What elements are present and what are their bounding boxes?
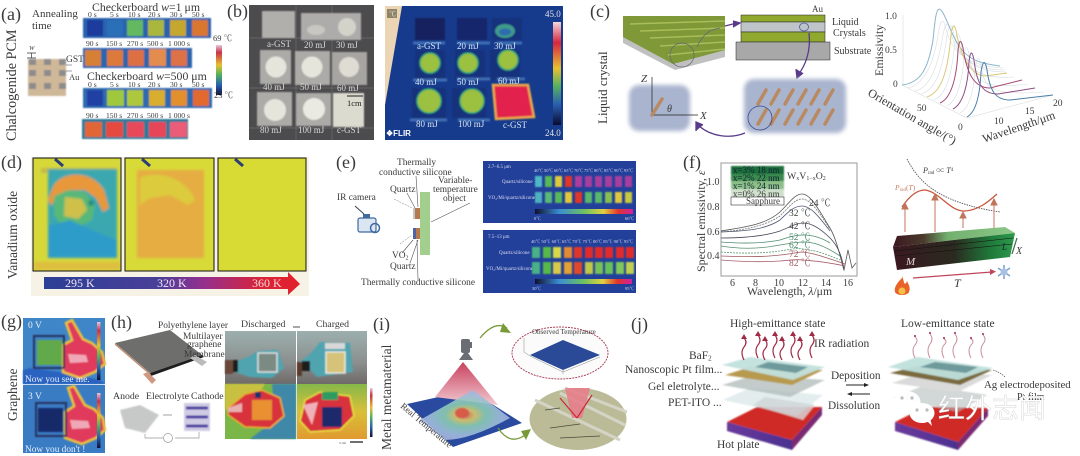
emissivity line chart: 0.4 [707, 251, 720, 262]
emissivity line chart [694, 163, 857, 298]
IR setup diagram: VO [392, 251, 406, 261]
3D emissivity chart: 20 [1053, 99, 1063, 109]
emissivity line chart: 0.6 [707, 227, 720, 238]
photo discharged [225, 331, 296, 384]
sample photograph: c-GST [337, 125, 361, 135]
electrode labels and lattice: Electrolyte [146, 391, 190, 402]
deposition arrows [828, 370, 881, 412]
checkerboard sample photo: W [29, 45, 35, 52]
time labels row 4: 1 000 s [168, 111, 190, 120]
emissivity line chart: 10 [774, 278, 784, 289]
IR setup diagram: IR camera [337, 193, 377, 203]
electrode labels and lattice [113, 391, 224, 442]
time labels row 3: 10 s [128, 80, 140, 89]
thermal array 3-5 um [483, 161, 636, 223]
rod array box [744, 79, 846, 133]
3D emissivity chart: 15 [1025, 107, 1035, 117]
sample photograph: 20 mJ [304, 40, 326, 50]
panel letter a: (a) [1, 4, 21, 25]
diagram: radiative power bar: rad [928, 171, 935, 176]
angle inset: Z [641, 73, 648, 85]
FLIR thermal image: ❖FLIR [386, 129, 411, 138]
emissivity line chart: 72 ℃ [789, 249, 810, 260]
real temperature plate [399, 362, 522, 450]
3D emissivity chart: Orientation angle/(°) [866, 85, 959, 147]
FLIR thermal image: 24.0 [545, 128, 561, 138]
electrode labels and lattice: Cathode [191, 391, 224, 402]
high emittance stack: 2 [708, 354, 712, 362]
device layer sketch: Polyethylene layer [158, 321, 229, 331]
thermal array 3-5 um: 2.7–6.5 μm [488, 165, 511, 170]
layer cross-section: Crystals [833, 28, 866, 39]
state titles: Low-emittance state [901, 318, 995, 330]
panel: h battery device [111, 312, 372, 445]
emissivity line chart: 42 ℃ [789, 221, 810, 232]
temperature arrow: 295 K [65, 276, 95, 290]
FLIR thermal image [385, 6, 563, 140]
emissivity line chart: O [816, 171, 823, 182]
panel: a chalcogenide PCM [1, 0, 233, 141]
diagram: radiative power bar: X [1015, 246, 1023, 257]
deposition arrows: Deposition [831, 370, 881, 382]
time labels row 2: 150 s [106, 39, 122, 48]
diagram: radiative power bar: T [954, 276, 962, 290]
annealing time label: time [32, 20, 52, 32]
high emittance stack: Gel eletrolyte... [648, 381, 720, 393]
thermal hand 3 V [23, 385, 105, 455]
3D emissivity chart: Wavelength/μm [980, 108, 1058, 146]
thermal array 7.5-13 um: 95℃ [625, 286, 634, 291]
thermal array 7.5-13 um: Quartz/silicone [499, 251, 530, 256]
panel letter e: (e) [336, 152, 356, 173]
temperature arrow: 360 K [252, 276, 282, 290]
colour scale: 69 ℃ [213, 33, 232, 43]
panel letter b: (b) [227, 1, 248, 22]
time labels row 2: 1 000 s [168, 39, 190, 48]
sample photograph: 1cm [347, 98, 362, 108]
observed temperature oval: Observed Temperature [532, 328, 596, 336]
diagram: radiative power bar: ( [906, 183, 909, 192]
thermal array 7.5-13 um: 40℃ 50℃ 60℃ 65℃ 70℃ 75℃ 80℃ 85℃ 90℃ 95℃ [531, 239, 634, 244]
panel: i metal metamaterial [373, 314, 627, 450]
FLIR thermal image: ℃ [389, 10, 396, 18]
row label chalcogenide PCM: Chalcogenide PCM [4, 29, 20, 141]
time labels row 3: 5 s [110, 80, 119, 89]
FLIR thermal image: 60 mJ [498, 76, 520, 86]
diagram: radiative power bar: T [946, 166, 951, 175]
checkerboard sample photo: Au [69, 72, 80, 82]
high emittance stack: Nanoscopic Pt film... [625, 364, 723, 376]
thermal array 3-5 um: 0℃ [534, 216, 541, 221]
icon: snowflake [998, 265, 1010, 279]
panel letter j: (j) [631, 314, 648, 335]
green curved arrows [480, 323, 531, 440]
panel letter i: (i) [373, 314, 390, 335]
high emittance stack: Hot plate [717, 439, 759, 451]
checkerboard 500 um heading: Checkerboard w=500 μm [87, 69, 207, 83]
3D emissivity chart: 0 [893, 80, 898, 90]
diagram: radiative power bar: 4 [951, 168, 954, 173]
panel: b photo and thermal image [227, 1, 563, 140]
layer cross-section [736, 4, 872, 60]
thermal strip 2 [83, 48, 192, 68]
thermal hand 3 V: Now you don't ! [25, 445, 85, 455]
cream backing [31, 157, 309, 296]
device layer sketch: Membrane [184, 350, 225, 360]
device layer sketch: Multilayer [183, 332, 223, 342]
emissivity line chart: Sapphure [746, 196, 780, 206]
time labels row 1: 20 s [148, 10, 160, 19]
checkerboard sample photo [27, 45, 84, 96]
watermark: 红外志闻 [938, 394, 1046, 424]
row label metal metamaterial: Metal metamaterial [379, 344, 394, 450]
icon: IR camera [355, 206, 380, 232]
metamaterial close-up oval [530, 388, 627, 450]
state titles: High-emittance state [730, 318, 825, 330]
thermal array 3-5 um: VO₂/Mi/quartz/silicone [488, 196, 536, 201]
row label liquid crystal: Liquid crystal [595, 51, 610, 124]
thermal array 7.5-13 um [483, 230, 636, 293]
emissivity line chart: 82 ℃ [789, 258, 810, 269]
thermal charged [297, 384, 367, 439]
electrode labels and lattice: Anode [113, 391, 140, 402]
emissivity line chart: V [799, 171, 806, 182]
purple connector arrows [696, 21, 809, 136]
IR setup diagram: Thermally [397, 158, 436, 168]
panel letter c: (c) [590, 1, 610, 22]
time labels row 4: 150 s [106, 111, 122, 120]
thermal portrait 295 K [33, 158, 121, 271]
IR setup diagram: object [443, 194, 466, 204]
emissivity line chart: Spectral emissivity, ε [694, 170, 708, 272]
colour scale [213, 33, 233, 100]
photo charged [297, 331, 367, 384]
device layer sketch [115, 321, 229, 384]
state headings: Charged [316, 319, 349, 330]
temperature arrow [44, 272, 300, 295]
3D emissivity chart: 50 [917, 104, 927, 114]
thermal hand 3 V: 3 V [28, 392, 42, 402]
IR setup diagram: Quartz [390, 185, 416, 195]
thermal portrait 360 K [218, 158, 306, 271]
emissivity line chart: Wavelength, λ/μm [747, 285, 832, 298]
thermal array 7.5-13 um: VO₂/Mi/quartz/silicone [486, 267, 534, 272]
low emittance stack: Pt film [1017, 392, 1045, 403]
diagram: radiative power bar: P [894, 183, 900, 192]
diagram: radiative power bar: L [1001, 242, 1007, 252]
IR setup diagram: 2 [406, 256, 409, 262]
thermal array 7.5-13 um: 7.5–13 μm [488, 235, 510, 240]
layer cross-section: Au [812, 4, 823, 14]
emissivity line chart: 2 [823, 176, 826, 182]
time labels row 3: 0 s [88, 80, 97, 89]
FLIR thermal image: 20 mJ [457, 41, 479, 51]
emissivity line chart: 8 [753, 278, 758, 289]
3D emissivity chart: Emissivity [872, 25, 886, 76]
3D emissivity chart: 1.0 [885, 12, 897, 22]
panel: f spectral emissivity [683, 152, 1023, 298]
thermal portrait 320 K [125, 158, 214, 271]
panel letter h: (h) [111, 312, 132, 333]
thermal hand 0 V: Now you see me. [25, 375, 90, 385]
row label vanadium oxide: Vanadium oxide [5, 191, 20, 279]
device layer sketch: graphene [187, 340, 221, 350]
row label graphene: Graphene [5, 369, 20, 421]
sample photograph [249, 5, 374, 140]
IR setup diagram: Thermally conductive silicone [361, 278, 475, 288]
FLIR thermal image: a-GST [417, 41, 441, 51]
time labels row 2: 500 s [147, 39, 163, 48]
checkerboard 1 um heading: Checkerboard w=1 μm [92, 0, 200, 14]
diagram: radiative power bar: T) [908, 183, 915, 192]
sample photograph: a-GST [267, 39, 291, 49]
angle inset: X [699, 110, 708, 122]
emissivity line chart: 62 ℃ [789, 240, 810, 251]
FLIR thermal image: 50 mJ [457, 77, 479, 87]
thermal strip 4 [82, 119, 188, 139]
panel letter g: (g) [1, 311, 22, 332]
FLIR thermal image: 30 mJ [494, 41, 516, 51]
FLIR thermal image: 45.0 [545, 9, 561, 19]
thermal array 3-5 um: 40℃ 50℃ 60℃ 65℃ 70℃ 75℃ 80℃ 85℃ 90℃ 95℃ [534, 168, 634, 173]
angle inset: θ [667, 104, 672, 115]
diagram: radiative power bar: P [922, 166, 928, 175]
high emittance stack: IR radiation [814, 338, 869, 350]
thermal discharged [225, 384, 296, 439]
3D grating surface [623, 16, 725, 70]
observed temperature oval [512, 327, 608, 379]
icon: thermal camera [459, 339, 473, 360]
icon: flame [895, 276, 910, 295]
time labels row 1: 10 s [128, 10, 140, 19]
colour scale: 23 ℃ [214, 90, 233, 100]
sample photograph: 80 mJ [260, 125, 282, 135]
IR setup diagram [337, 158, 478, 288]
time labels row 1: 30 s [170, 10, 182, 19]
emissivity line chart: 16 [843, 278, 853, 289]
IR setup diagram: Variable- [438, 176, 472, 186]
thermal hand 0 V [23, 318, 105, 385]
panel: d vanadium oxide [1, 152, 309, 296]
diagram: radiative power bar [893, 159, 1023, 290]
scale bar for h [339, 388, 372, 445]
time labels row 1: 5 s [110, 10, 119, 19]
emissivity line chart: 32 ℃ [789, 208, 810, 219]
emissivity line chart: x [796, 176, 799, 182]
time labels row 1: 50 s [192, 10, 204, 19]
FLIR thermal image: c-GST [503, 120, 527, 130]
low emittance stack: Ag electrodeposited [984, 379, 1071, 391]
panel: j emittance device [625, 314, 1071, 451]
checkerboard sample photo: GST [66, 55, 84, 65]
emissivity line chart: x=1% 24 nm [733, 181, 780, 191]
sample photograph: 40 mJ [263, 82, 285, 92]
FLIR thermal image: 100 mJ [458, 119, 485, 129]
sample photograph: 100 mJ [298, 125, 325, 135]
time labels row 4: 500 s [147, 111, 163, 120]
state titles [730, 318, 995, 330]
sample photograph: 50 mJ [300, 82, 322, 92]
emissivity line chart: 1−x [806, 176, 816, 182]
scale bar for h: 5 cm [339, 441, 346, 445]
time labels row 3: 20 s [148, 80, 160, 89]
emissivity line chart: x=2% 22 nm [733, 173, 780, 183]
emissivity line chart: 6 [730, 278, 735, 289]
emissivity line chart: 24 ℃ [809, 198, 830, 209]
emissivity line chart: W [787, 171, 796, 182]
time labels row 2: 90 s [86, 39, 98, 48]
thermal strip 1 [83, 18, 211, 38]
panel: g graphene [1, 311, 105, 455]
diagram: radiative power bar: ∝ [934, 166, 946, 175]
thermal hand 0 V: 0 V [28, 321, 42, 331]
IR setup diagram: conductive silicone [379, 168, 452, 178]
time labels row 1: 0 s [88, 10, 97, 19]
angle inset [629, 73, 708, 131]
thermal strip 3 [83, 88, 212, 108]
high emittance stack: PET-ITO ... [668, 397, 722, 409]
thermal array 3-5 um: 60℃ [625, 216, 634, 221]
time labels row 3: 30 s [170, 80, 182, 89]
temperature arrow: 320 K [157, 276, 187, 290]
time labels row 4: 270 s [127, 111, 143, 120]
time labels row 3: 50 s [192, 80, 204, 89]
annealing time label: Annealing [32, 8, 78, 20]
3D emissivity chart: 0.5 [885, 46, 897, 56]
deposition arrows: Dissolution [828, 400, 880, 412]
IR setup diagram: temperature [433, 185, 478, 195]
time labels row 2: 270 s [127, 39, 143, 48]
3D emissivity chart [866, 9, 1063, 147]
emissivity line chart: x=0% 26 nm [733, 189, 780, 199]
high emittance stack: BaF [689, 350, 708, 362]
IR setup diagram: Quartz [390, 262, 416, 272]
FLIR thermal image: 40 mJ [415, 77, 437, 87]
emissivity line chart: 52 ℃ [789, 232, 810, 243]
time labels row 4: 90 s [86, 111, 98, 120]
panel letter d: (d) [1, 152, 22, 173]
emissivity line chart: 14 [821, 278, 831, 289]
emissivity line chart: x=3% 18 nm [733, 165, 780, 175]
panel letter f: (f) [683, 152, 701, 173]
panel: e thermal camera experiment [336, 152, 636, 293]
layer cross-section: Substrate [834, 46, 872, 57]
thermal array 7.5-13 um: 30℃ [532, 286, 542, 291]
sample photograph: 30 mJ [336, 40, 358, 50]
FLIR thermal image: 80 mJ [416, 119, 438, 129]
thermal array 3-5 um: Quartz/silicone [502, 180, 533, 185]
low emittance stack [888, 332, 1071, 450]
3D emissivity chart: 10 [994, 117, 1004, 127]
watermark [894, 391, 1046, 426]
emissivity line chart: 12 [798, 278, 808, 289]
panel: c liquid crystal [590, 1, 1063, 147]
3D emissivity chart: 0 [958, 123, 963, 133]
state headings: Discharged [241, 319, 286, 330]
emissivity line chart: 1.0 [707, 177, 720, 188]
sample photograph: 60 mJ [337, 83, 359, 93]
emissivity line chart: 0.8 [707, 202, 720, 213]
diagram: radiative power bar: M [905, 256, 916, 268]
high emittance stack [625, 331, 869, 451]
diagram: radiative power bar: rad [900, 188, 906, 193]
state headings [241, 319, 349, 330]
layer cross-section: Liquid [832, 17, 859, 28]
real temperature plate: Real Temperature [399, 401, 454, 450]
